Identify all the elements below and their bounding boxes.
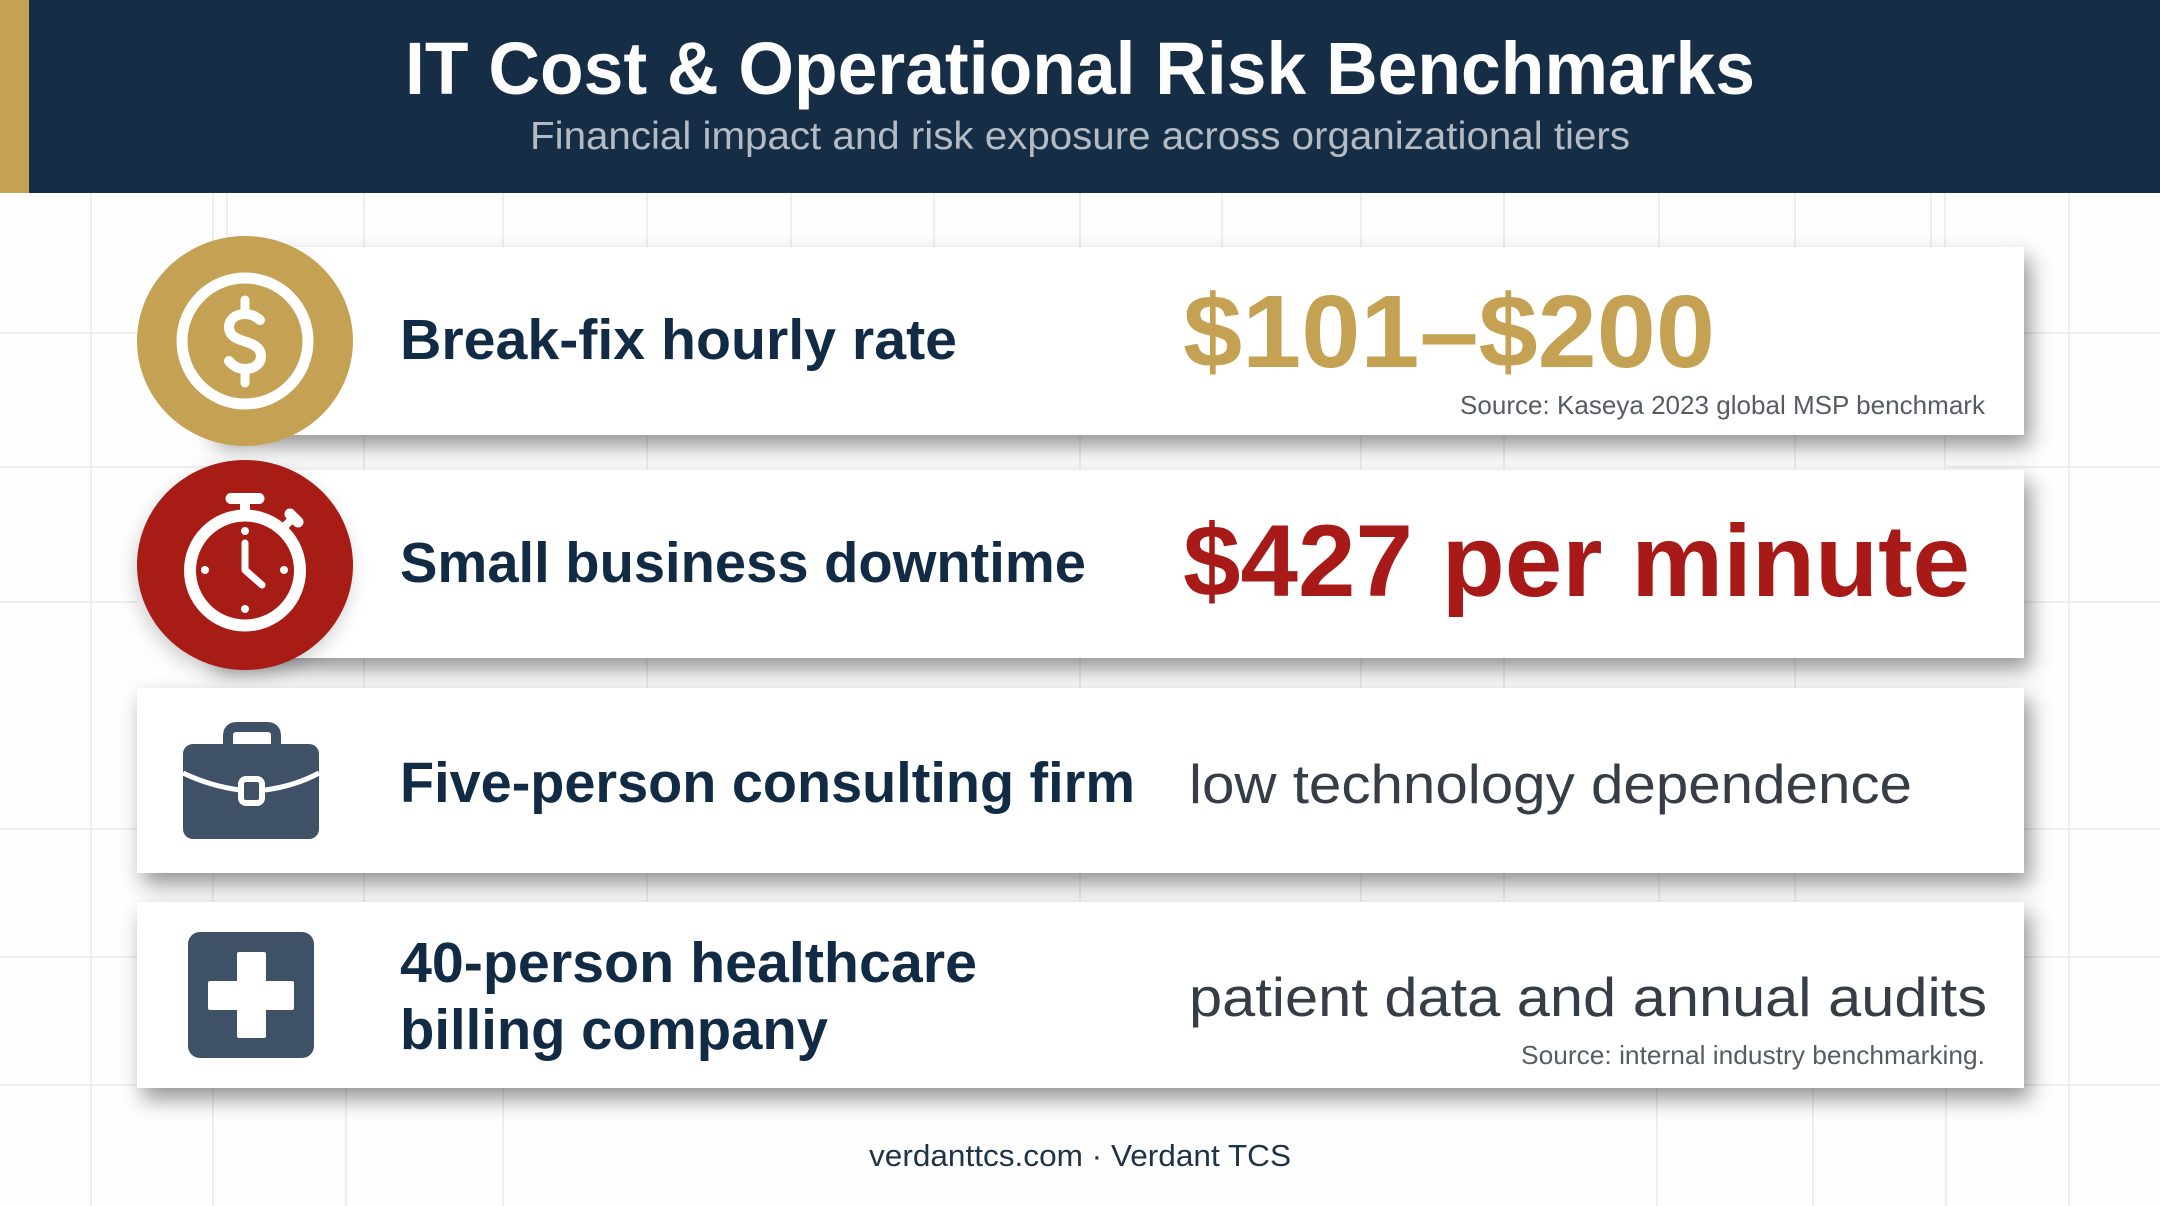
gold accent bar: [0, 0, 29, 193]
label: [400, 931, 977, 1062]
icon: gold dollar coin: [137, 236, 353, 446]
panel: 40-person healthcare billing company: [137, 902, 2024, 1088]
header banner: [0, 0, 2160, 193]
icon: medical cross: [188, 932, 314, 1058]
source note: Source: Kaseya 2023 global MSP benchmark: [1460, 390, 1986, 420]
card background: [210, 247, 2024, 435]
label: Five-person consulting firm: [400, 751, 1135, 815]
panel: five-person consulting firm: [137, 688, 2024, 873]
label: 40-person healthcare: [400, 931, 977, 995]
title: IT Cost & Operational Risk Benchmarks: [405, 27, 1755, 110]
icon: red stopwatch: [137, 460, 353, 670]
icon: briefcase: [183, 727, 319, 839]
label: Small business downtime: [400, 531, 1086, 595]
panel: break-fix hourly rate: [137, 236, 2024, 446]
descriptor: patient data and annual audits: [1189, 966, 1987, 1028]
subtitle: Financial impact and risk exposure across organizational tiers: [530, 115, 1630, 158]
label: billing company: [400, 998, 828, 1062]
card background: [210, 470, 2024, 658]
descriptor: low technology dependence: [1189, 753, 1912, 815]
value: $101–$200: [1183, 274, 1715, 389]
source note: Source: internal industry benchmarking.: [1521, 1040, 1985, 1070]
label: Break-fix hourly rate: [400, 308, 957, 372]
card background: [137, 688, 2024, 873]
footer: verdanttcs.com · Verdant TCS: [869, 1138, 1291, 1173]
panel: small business downtime: [137, 460, 2024, 670]
value: $427 per minute: [1183, 504, 1970, 618]
card background: [137, 902, 2024, 1088]
